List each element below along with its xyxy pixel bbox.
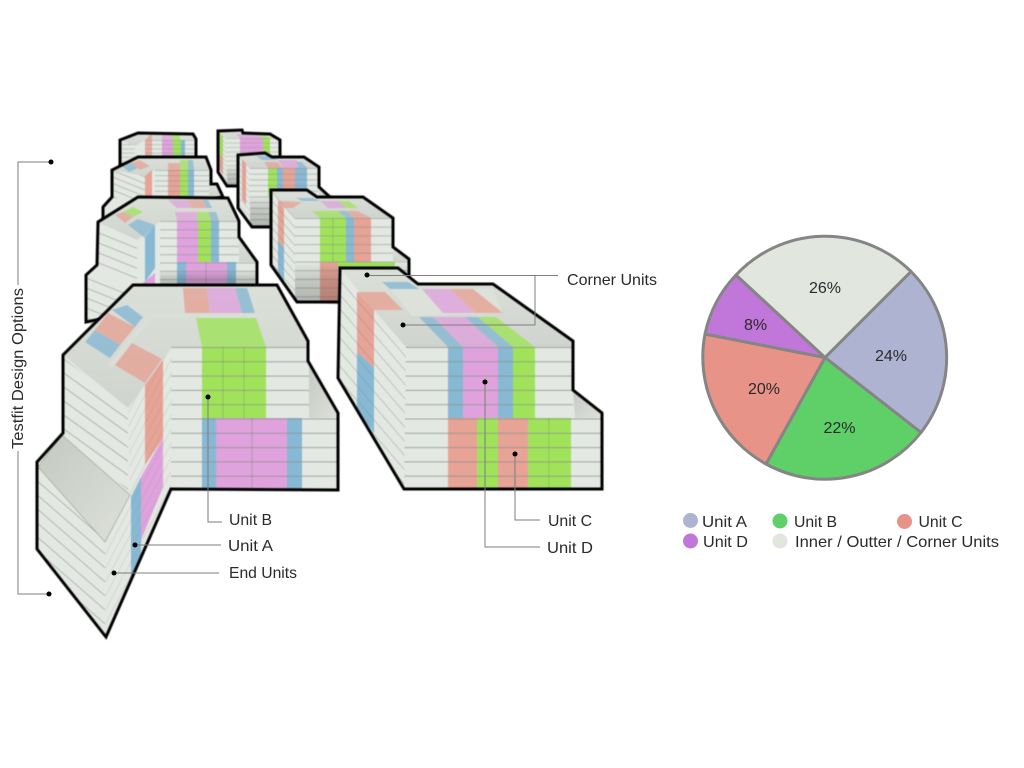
callout: Unit B	[206, 394, 272, 529]
pie labels: 26%	[809, 280, 841, 297]
rear setback roof	[573, 390, 602, 418]
roof walkway	[108, 313, 265, 367]
bracket: Testfit design options: Testfit Design Options	[10, 288, 27, 449]
lower roof	[38, 435, 130, 542]
slice: Unit D 8%	[705, 275, 825, 358]
legend: Inner / Outter / Corner Units	[795, 534, 999, 551]
building: rear left row 4	[120, 133, 196, 168]
callout: Corner Units	[364, 272, 657, 328]
roof unit stripes	[357, 282, 535, 347]
side face lines	[105, 347, 172, 637]
building: front left	[37, 285, 338, 637]
front elevation upper: Unit B	[202, 347, 266, 418]
slice: Unit B 22%	[766, 358, 921, 479]
callout: Unit A	[132, 538, 273, 555]
pie labels: 8%	[744, 317, 767, 334]
left face lines	[338, 268, 406, 489]
legend: Unit B	[794, 514, 837, 531]
upper left face	[63, 358, 128, 490]
pie labels	[744, 280, 907, 437]
slice: Unit C 20%	[703, 334, 825, 464]
outline	[37, 285, 338, 637]
callout: End Units: End Units	[229, 565, 297, 582]
building: rear left row 3	[86, 197, 257, 330]
front elevation lower: Units A and D	[202, 418, 302, 489]
building: front right	[338, 268, 602, 489]
callout: Corner Units: Corner Units	[567, 272, 657, 289]
roof light panel	[390, 289, 503, 316]
building mass	[37, 285, 338, 637]
slice: Inner / Outter / Corner 26%	[736, 236, 911, 358]
callout: Unit A: Unit A	[228, 538, 273, 555]
lower left face	[38, 467, 105, 637]
roof unit stripes	[85, 288, 266, 383]
front elevation upper stripes	[448, 347, 535, 418]
floor lines	[171, 347, 338, 489]
legend: Unit A	[702, 514, 747, 531]
callout: End Units	[112, 565, 297, 582]
outline	[338, 268, 602, 489]
legend	[683, 513, 999, 551]
building mass	[338, 268, 602, 489]
building: rear right row 3	[271, 190, 409, 310]
roof	[340, 268, 573, 347]
callout: Unit C: Unit C	[548, 513, 592, 530]
pie labels: 24%	[875, 348, 907, 365]
building: rear right row 1	[218, 130, 280, 186]
front elevation lower stripes	[448, 418, 571, 489]
left face stripes	[357, 292, 374, 433]
rear setback roof	[309, 361, 338, 418]
side face stripes	[131, 360, 163, 580]
pie chart	[703, 236, 947, 479]
bracket: Testfit design options	[10, 160, 54, 596]
callout: Unit B: Unit B	[229, 512, 272, 529]
legend: Unit C	[918, 514, 962, 531]
callout: Unit D	[482, 380, 593, 557]
building: rear left row 2	[103, 157, 223, 225]
floor lines	[404, 347, 602, 489]
slice: Unit A 24%	[825, 272, 947, 432]
legend: Unit D	[703, 534, 748, 551]
pie labels: 22%	[823, 420, 856, 437]
building: rear right row 2	[238, 153, 332, 265]
callout: Unit D: Unit D	[547, 540, 593, 557]
callout: Unit C	[512, 452, 592, 530]
upper roof	[63, 285, 308, 408]
pie labels: 20%	[748, 381, 780, 398]
